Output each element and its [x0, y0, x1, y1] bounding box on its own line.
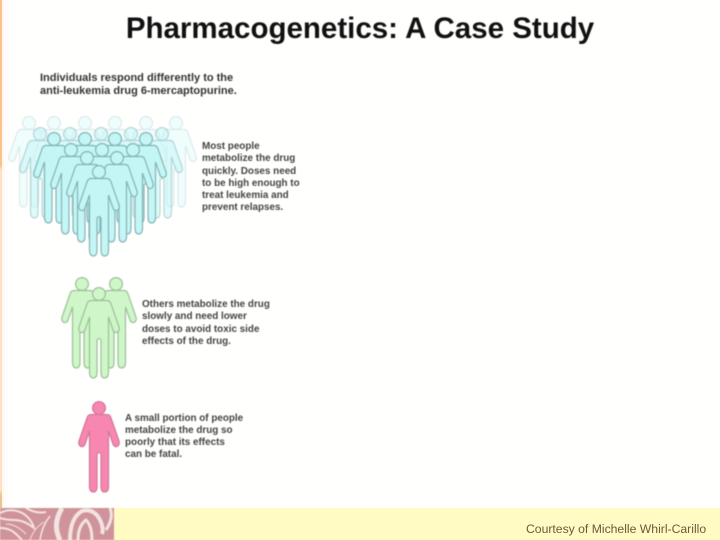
text: others: Others metabolize the drug	[142, 299, 270, 310]
left edge tint	[0, 0, 10, 508]
text: small portion	[124, 412, 244, 460]
text: most people: prevent relapses.	[202, 202, 283, 213]
left edge strip	[0, 0, 2, 508]
text: small portion: metabolize the drug so	[125, 425, 233, 436]
figure: poor metabolizer	[79, 402, 119, 492]
text: most people: to be high enough to	[202, 178, 300, 189]
text: most people	[202, 140, 300, 213]
text: most people: metabolize the drug	[202, 153, 295, 164]
title: Pharmacogenetics: A Case Study	[126, 12, 594, 45]
text: others: effects of the drug.	[142, 336, 231, 347]
text: others: slowly and need lower	[142, 311, 247, 322]
group: slow metabolizers	[62, 278, 136, 378]
intro text: anti-leukemia drug 6-mercaptopurine.	[40, 85, 237, 97]
text: small portion: A small portion of people	[125, 412, 243, 424]
credit: Courtesy of Michelle Whirl-Carillo	[526, 522, 706, 536]
text: most people: Most people	[202, 141, 260, 152]
footer band	[0, 508, 720, 540]
intro text: Individuals respond differently to the	[40, 72, 233, 84]
text: most people: treat leukemia and	[202, 190, 289, 201]
text: others: doses to avoid toxic side	[142, 324, 259, 335]
crowd: fast metabolizers	[9, 117, 196, 256]
text: small portion: poorly that its effects	[125, 437, 225, 448]
footer tissue image	[0, 507, 115, 540]
text: most people: quickly. Doses need	[202, 166, 296, 177]
intro text	[40, 72, 237, 98]
text: others	[142, 298, 270, 347]
text: small portion: can be fatal.	[125, 449, 182, 460]
